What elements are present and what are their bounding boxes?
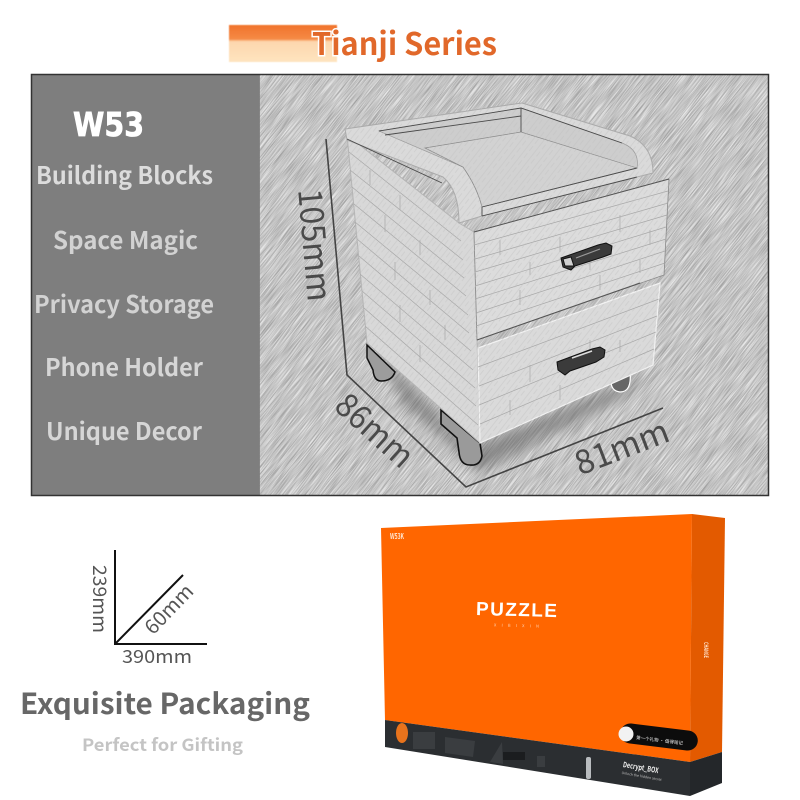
- feature: building blocks: Building Blocks: [36, 156, 213, 191]
- feature: space magic: Space Magic: [53, 221, 198, 256]
- box subtitle: X I B I X I N: [494, 622, 539, 630]
- feature: privacy storage: Privacy Storage: [34, 285, 214, 320]
- box name: PUZZLE: [476, 599, 557, 622]
- top frame: [345, 103, 653, 223]
- dimension: package height: 239mm: [87, 565, 114, 633]
- cabinet side: [347, 135, 480, 443]
- tray interior: [379, 108, 637, 207]
- top drawer: [474, 179, 669, 340]
- model badge: W53: [73, 105, 144, 144]
- box pill label: 第一个礼物 · 值得铭记: [636, 734, 684, 747]
- package dimensions diagram: [87, 550, 207, 669]
- front-left foot: [441, 410, 482, 465]
- feature: phone holder: Phone Holder: [45, 348, 204, 383]
- box band graphics: [413, 732, 545, 767]
- frame edge lines: [347, 108, 637, 216]
- left feature column: [32, 75, 260, 495]
- dimension: package width: 390mm: [122, 643, 192, 669]
- panel: product dimensions: [30, 74, 770, 496]
- box side label: CHANGE: [702, 642, 711, 658]
- title accent block: [229, 25, 337, 62]
- right foot: [611, 372, 630, 392]
- heading: exquisite packaging: Exquisite Packaging: [20, 681, 310, 723]
- frame texture: [345, 103, 653, 223]
- box decrypt label: Decrypt_BOX: [622, 759, 660, 776]
- box dark band side: [690, 752, 722, 796]
- dimension axes: [115, 550, 207, 644]
- feature: unique decor: Unique Decor: [46, 412, 203, 447]
- dimension lines: [326, 139, 663, 487]
- box side face: [690, 514, 725, 762]
- lower drawer: [478, 283, 660, 443]
- panel border: [32, 74, 768, 496]
- dimension: height 105mm: 105mm: [288, 186, 346, 303]
- back-left foot: [367, 345, 395, 381]
- box decrypt label: [621, 759, 665, 783]
- dimension: package depth: 60mm: [137, 576, 199, 640]
- box brand mark: W53K: [390, 531, 404, 542]
- box pill label: [618, 722, 699, 752]
- top handle: [561, 243, 612, 270]
- cabinet illustration: [345, 103, 670, 465]
- tray floor: [425, 132, 637, 207]
- dimension: depth 86mm: 86mm: [326, 380, 427, 477]
- subheading: perfect for gifting: Perfect for Gifting: [82, 731, 243, 756]
- lower handle: [557, 347, 605, 375]
- box band handle: [586, 757, 591, 779]
- title: Tianji Series: [312, 19, 497, 64]
- box dark band front: [385, 720, 690, 796]
- box orange seal: [396, 723, 408, 743]
- dimension: width 81mm: 81mm: [567, 405, 675, 485]
- cabinet top front edge: [474, 179, 669, 232]
- box front face: [381, 514, 692, 762]
- box decrypt label: Unlock the hidden secret: [621, 771, 663, 783]
- product box: [381, 514, 725, 796]
- brick texture: [345, 130, 670, 445]
